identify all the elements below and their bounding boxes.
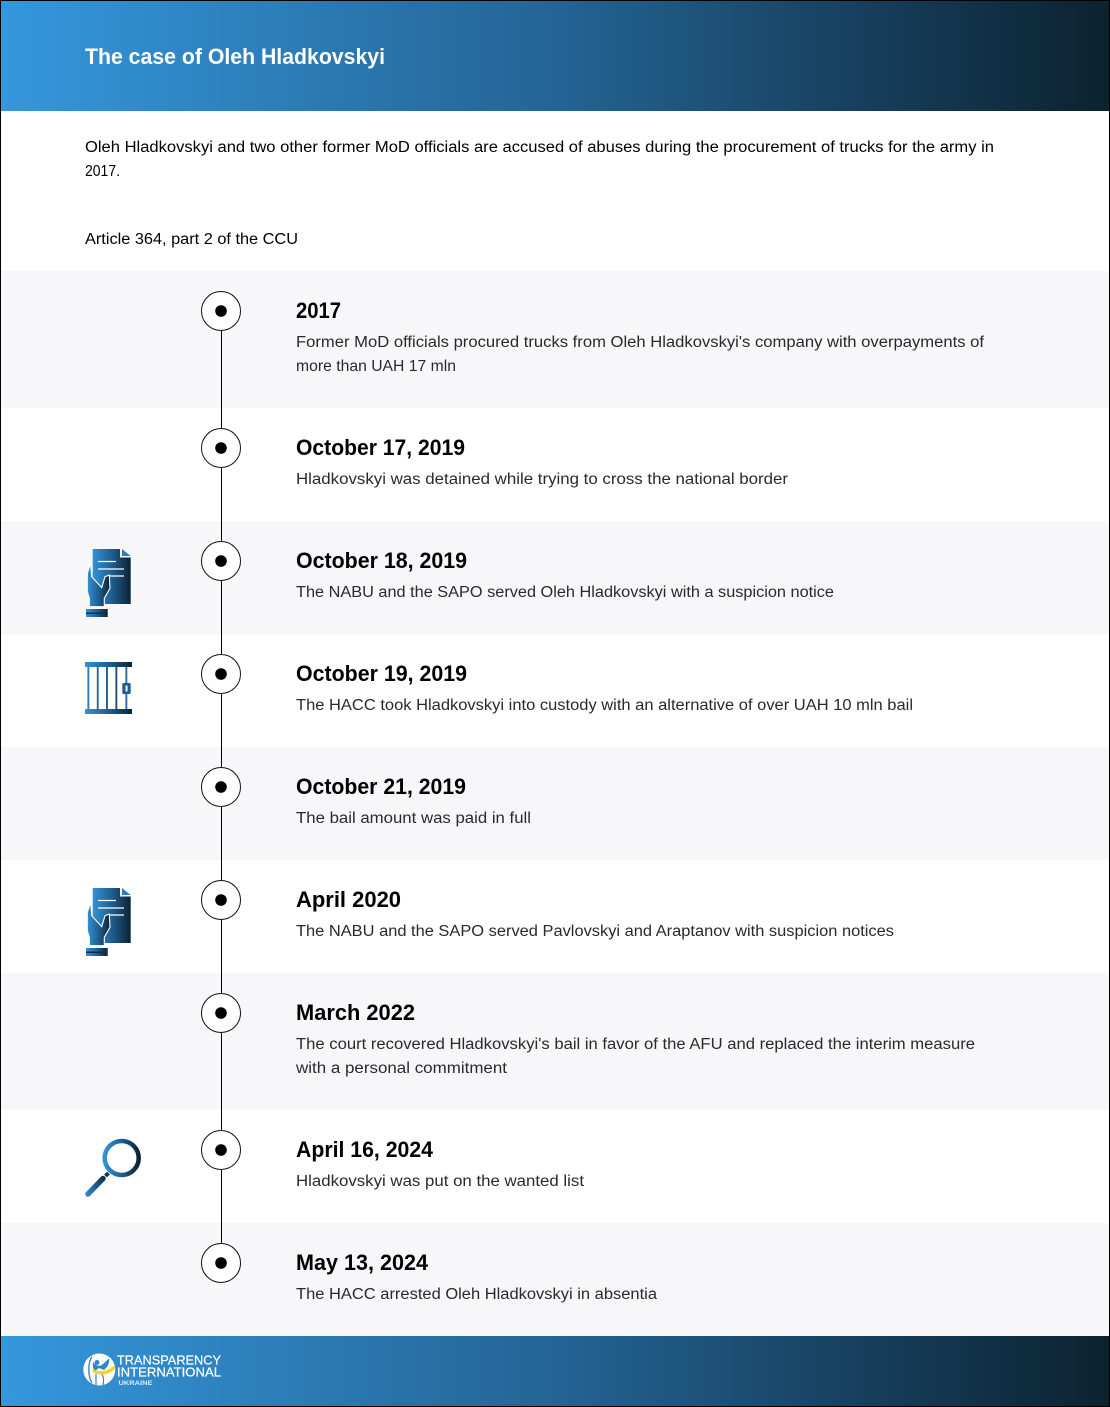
footer banner (1, 1336, 1109, 1406)
event: 2017: more than UAH 17 mln (296, 358, 456, 375)
event: October 17, 2019 (296, 435, 788, 488)
event: October 19, 2019: October 19, 2019 (296, 661, 467, 686)
event: October 19, 2019: The HACC took Hladkovskyi into custody with an alternative of over UAH 10 mln bail (296, 697, 913, 714)
logo: Transparency International Ukraine (83, 1352, 221, 1387)
header banner (1, 1, 1109, 111)
icon: prison bars (85, 662, 132, 714)
event: 2017: 2017 (296, 298, 341, 323)
event: March 2022 (295, 1000, 975, 1077)
event: April 16, 2024: April 16, 2024 (296, 1137, 434, 1162)
row band: October 21, 2019 (1, 747, 1109, 860)
timeline vertical line (220, 311, 222, 1263)
event: April 2020: The NABU and the SAPO served Pavlovskyi and Araptanov with suspicion notices (296, 923, 894, 940)
event: March 2022: with a personal commitment (295, 1060, 508, 1077)
icon: hand holding document (86, 888, 131, 956)
icon: hand holding document (86, 549, 131, 617)
row band: 2017 (1, 271, 1109, 408)
intro text (85, 139, 994, 180)
event: October 21, 2019: The bail amount was paid in full (296, 810, 531, 827)
timeline markers (202, 292, 240, 1282)
row band: March 2022 (1, 973, 1109, 1110)
event: April 16, 2024 (296, 1137, 585, 1190)
event: May 13, 2024: May 13, 2024 (296, 1250, 429, 1275)
intro text: 2017. (85, 163, 120, 180)
title: The case of Oleh Hladkovskyi (85, 44, 385, 69)
event: May 13, 2024 (296, 1250, 657, 1303)
event: March 2022: March 2022 (296, 1000, 415, 1025)
row band: October 18, 2019 (1, 521, 1109, 634)
intro text: Oleh Hladkovskyi and two other former MoD officials are accused of abuses during the procurement of trucks for the army in (85, 139, 994, 156)
event: April 16, 2024: Hladkovskyi was put on the wanted list (296, 1173, 585, 1190)
event: October 21, 2019 (296, 774, 531, 827)
legal article reference: Article 364, part 2 of the CCU (85, 231, 298, 248)
event: March 2022: The court recovered Hladkovskyi's bail in favor of the AFU and replaced the interim measure (296, 1036, 975, 1053)
logo: Transparency International Ukraine: TRANSPARENCY (117, 1352, 221, 1368)
event: October 18, 2019 (296, 548, 834, 601)
logo: Transparency International Ukraine: UKRAINE (118, 1380, 153, 1387)
event: October 18, 2019: The NABU and the SAPO served Oleh Hladkovskyi with a suspicion notice (296, 584, 834, 601)
icon: magnifying glass (88, 1141, 139, 1194)
event: April 2020 (296, 887, 894, 940)
event: October 18, 2019: October 18, 2019 (296, 548, 467, 573)
logo: Transparency International Ukraine: INTERNATIONAL (117, 1364, 221, 1380)
event: April 2020: April 2020 (296, 887, 401, 912)
event: October 19, 2019 (296, 661, 913, 714)
event: 2017: Former MoD officials procured trucks from Oleh Hladkovskyi's company with overpayments of (296, 334, 985, 351)
row band: May 13, 2024 (1, 1223, 1109, 1336)
event: October 17, 2019: October 17, 2019 (296, 435, 465, 460)
event: May 13, 2024: The HACC arrested Oleh Hladkovskyi in absentia (296, 1286, 657, 1303)
event: October 21, 2019: October 21, 2019 (296, 774, 466, 799)
event: October 17, 2019: Hladkovskyi was detained while trying to cross the national border (296, 471, 788, 488)
event: 2017 (296, 298, 985, 375)
